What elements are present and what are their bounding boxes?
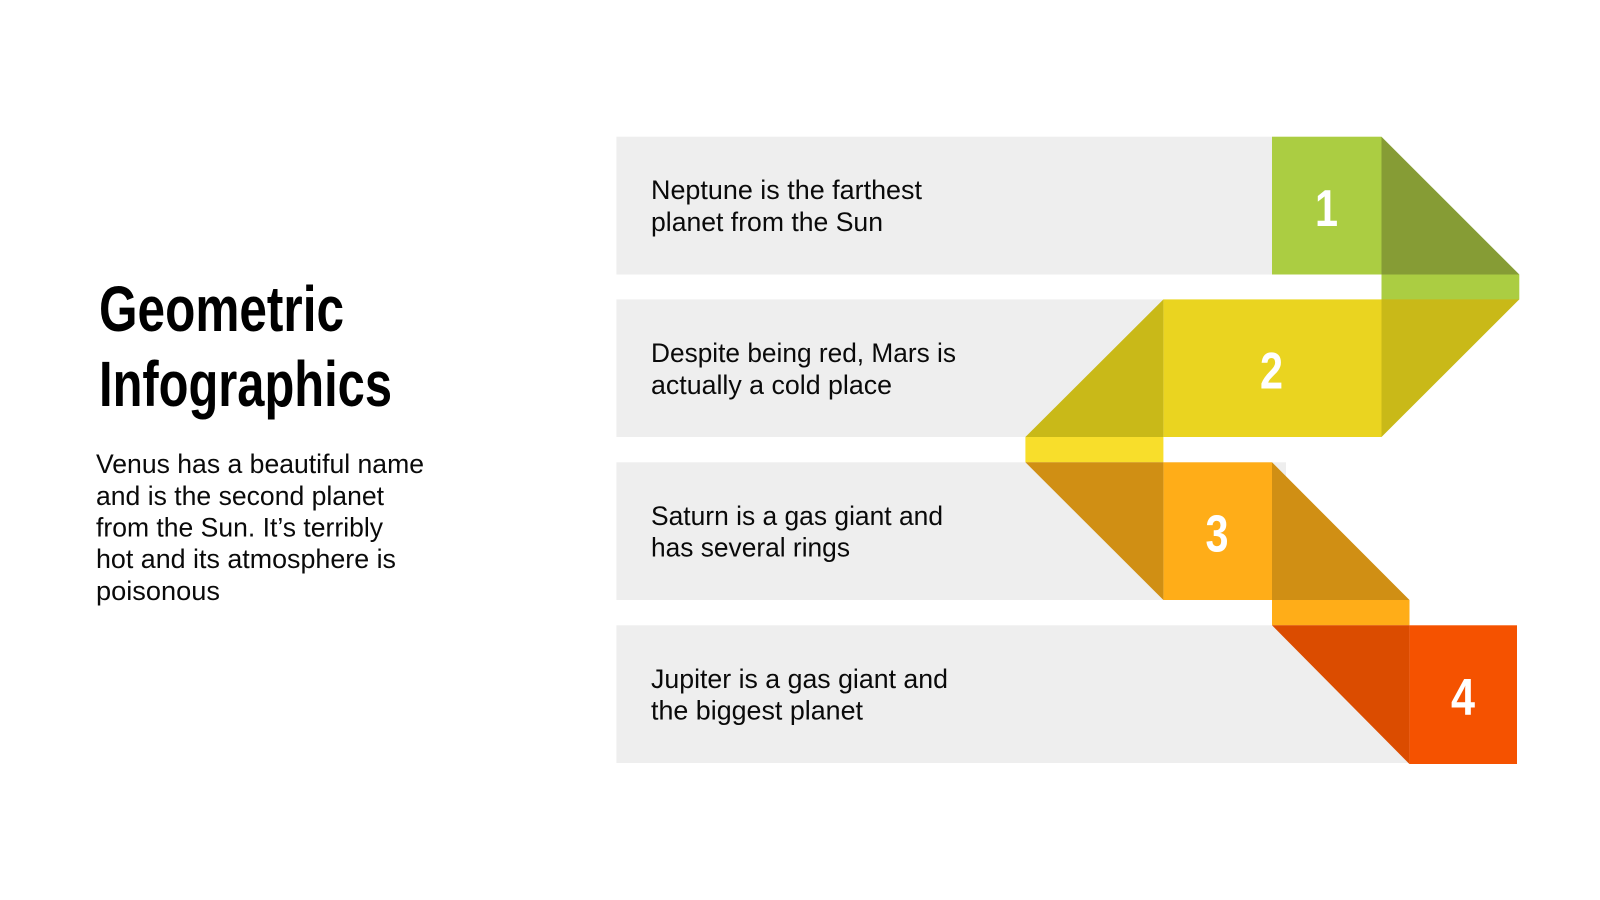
intro text block: Venus has a beautiful name [96,449,424,479]
number 3: 3 [1206,506,1228,564]
text: Neptune: planet from the Sun [651,207,883,237]
intro text block: hot and its atmosphere is [96,544,396,574]
title [99,273,392,420]
text: Jupiter [651,664,948,726]
intro text block [96,449,424,606]
text: Jupiter: the biggest planet [651,696,864,726]
panel: row 1 background [616,137,1272,274]
intro text block: and is the second planet [96,481,385,511]
ribbon segment 1: green [1272,137,1519,300]
intro text block: poisonous [96,576,220,606]
text: Saturn: has several rings [651,532,850,562]
text: Saturn: Saturn is a gas giant and [651,501,943,531]
panel: row 4 background [616,625,1409,763]
text: Mars: Despite being red, Mars is [651,338,956,368]
title: Infographics [99,348,392,420]
text: Neptune: Neptune is the farthest [651,175,923,205]
number 1: 1 [1315,180,1338,238]
number 4: 4 [1451,669,1475,727]
panel: row 2 background [616,299,1163,437]
text: Neptune [651,175,923,237]
panel: row 3 background [616,462,1286,600]
text: Jupiter: Jupiter is a gas giant and [651,664,948,694]
ribbon segment 4: red-orange [1272,625,1517,764]
text: Mars: actually a cold place [651,370,892,400]
text: Saturn [651,501,943,562]
intro text block: from the Sun. It’s terribly [96,512,384,542]
ribbon segment 2: yellow [1025,299,1519,462]
ribbon segment 3: orange [1025,462,1410,625]
text: Mars [651,338,956,400]
title: Geometric [99,273,344,345]
number 2: 2 [1260,342,1283,400]
